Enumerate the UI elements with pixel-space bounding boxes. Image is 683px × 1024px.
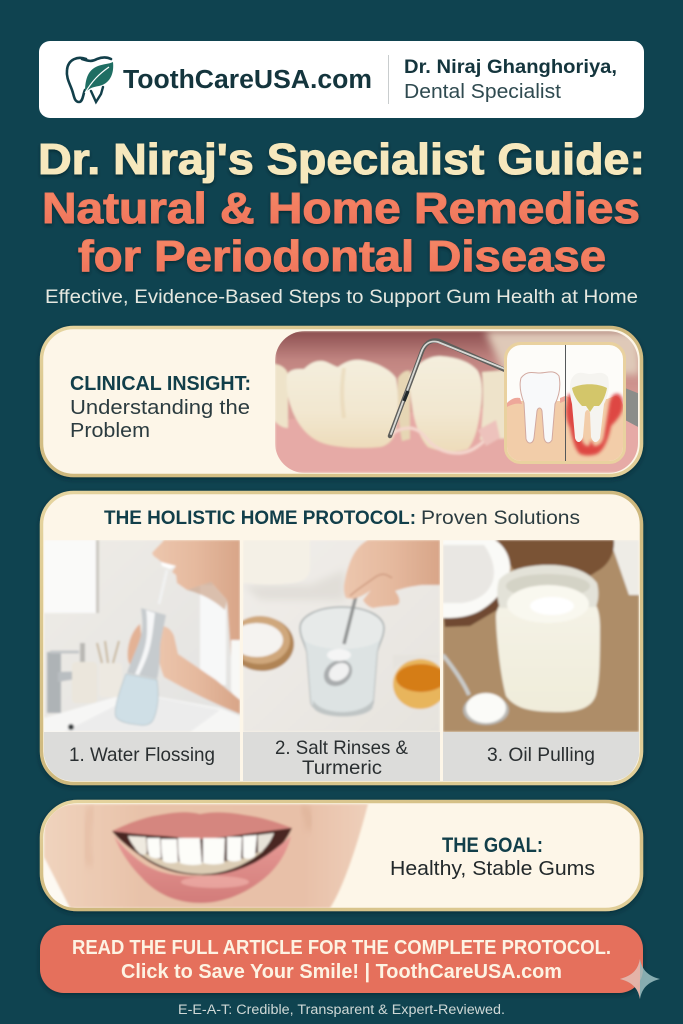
caption: water flossing: 1. Water Flossing — [69, 744, 215, 766]
lower teeth — [134, 848, 264, 874]
upper lip — [112, 812, 292, 839]
title: Dr. Niraj's Specialist Guide: — [38, 136, 645, 184]
icon: tooth with leaf logo — [67, 58, 113, 102]
title: Natural & Home Remedies — [42, 185, 640, 233]
panel: clinical insight — [42, 328, 642, 476]
clinical insight text: CLINICAL INSIGHT: — [70, 373, 251, 395]
caption: salt rinses and turmeric: Turmeric — [302, 757, 382, 779]
mouth interior — [112, 828, 292, 875]
subtitle: Effective, Evidence-Based Steps to Support Gum Health at Home — [45, 287, 638, 308]
title: for Periodontal Disease — [78, 233, 606, 281]
panel heading: THE HOLISTIC HOME PROTOCOL: — [104, 507, 416, 529]
lower lip — [114, 836, 291, 903]
upper teeth — [128, 833, 274, 865]
call to action button — [40, 925, 643, 993]
goal text: THE GOAL: — [442, 834, 543, 857]
inset: healthy versus diseased tooth diagram — [506, 344, 624, 462]
photo: coconut oil jar — [443, 540, 639, 732]
footer note: E-E-A-T: Credible, Transparent & Expert-Reviewed. — [178, 1002, 505, 1017]
goal text — [390, 834, 595, 880]
doctor name: Dr. Niraj Ghanghoriya, — [404, 57, 617, 78]
goal text: Healthy, Stable Gums — [390, 857, 595, 880]
clinical insight text: Problem — [70, 420, 150, 442]
panel heading: Proven Solutions — [421, 507, 580, 529]
photo: salt rinse and turmeric — [230, 540, 447, 732]
caption: oil pulling: 3. Oil Pulling — [487, 744, 595, 766]
site name: ToothCareUSA.com — [123, 66, 372, 94]
photo: periodontal probe between teeth — [275, 331, 640, 473]
photo: water flossing — [44, 540, 240, 732]
caption: salt rinses and turmeric — [275, 737, 408, 779]
icon: sparkle — [620, 959, 660, 999]
doctor role: Dental Specialist — [404, 81, 561, 103]
photo: healthy smile — [44, 804, 368, 908]
panel heading — [104, 507, 580, 529]
clinical insight text — [70, 373, 251, 442]
clinical insight text: Understanding the — [70, 397, 250, 419]
button text line one: READ THE FULL ARTICLE FOR THE COMPLETE PROTOCOL. — [72, 937, 611, 959]
title — [38, 136, 645, 281]
button text line two: Click to Save Your Smile! | ToothCareUSA.com — [121, 961, 562, 983]
panel: the holistic home protocol — [42, 492, 642, 784]
header bar — [39, 41, 644, 118]
panel: the goal — [42, 802, 642, 910]
caption: salt rinses and turmeric: 2. Salt Rinses & — [275, 737, 408, 759]
caption backgrounds — [44, 732, 639, 781]
